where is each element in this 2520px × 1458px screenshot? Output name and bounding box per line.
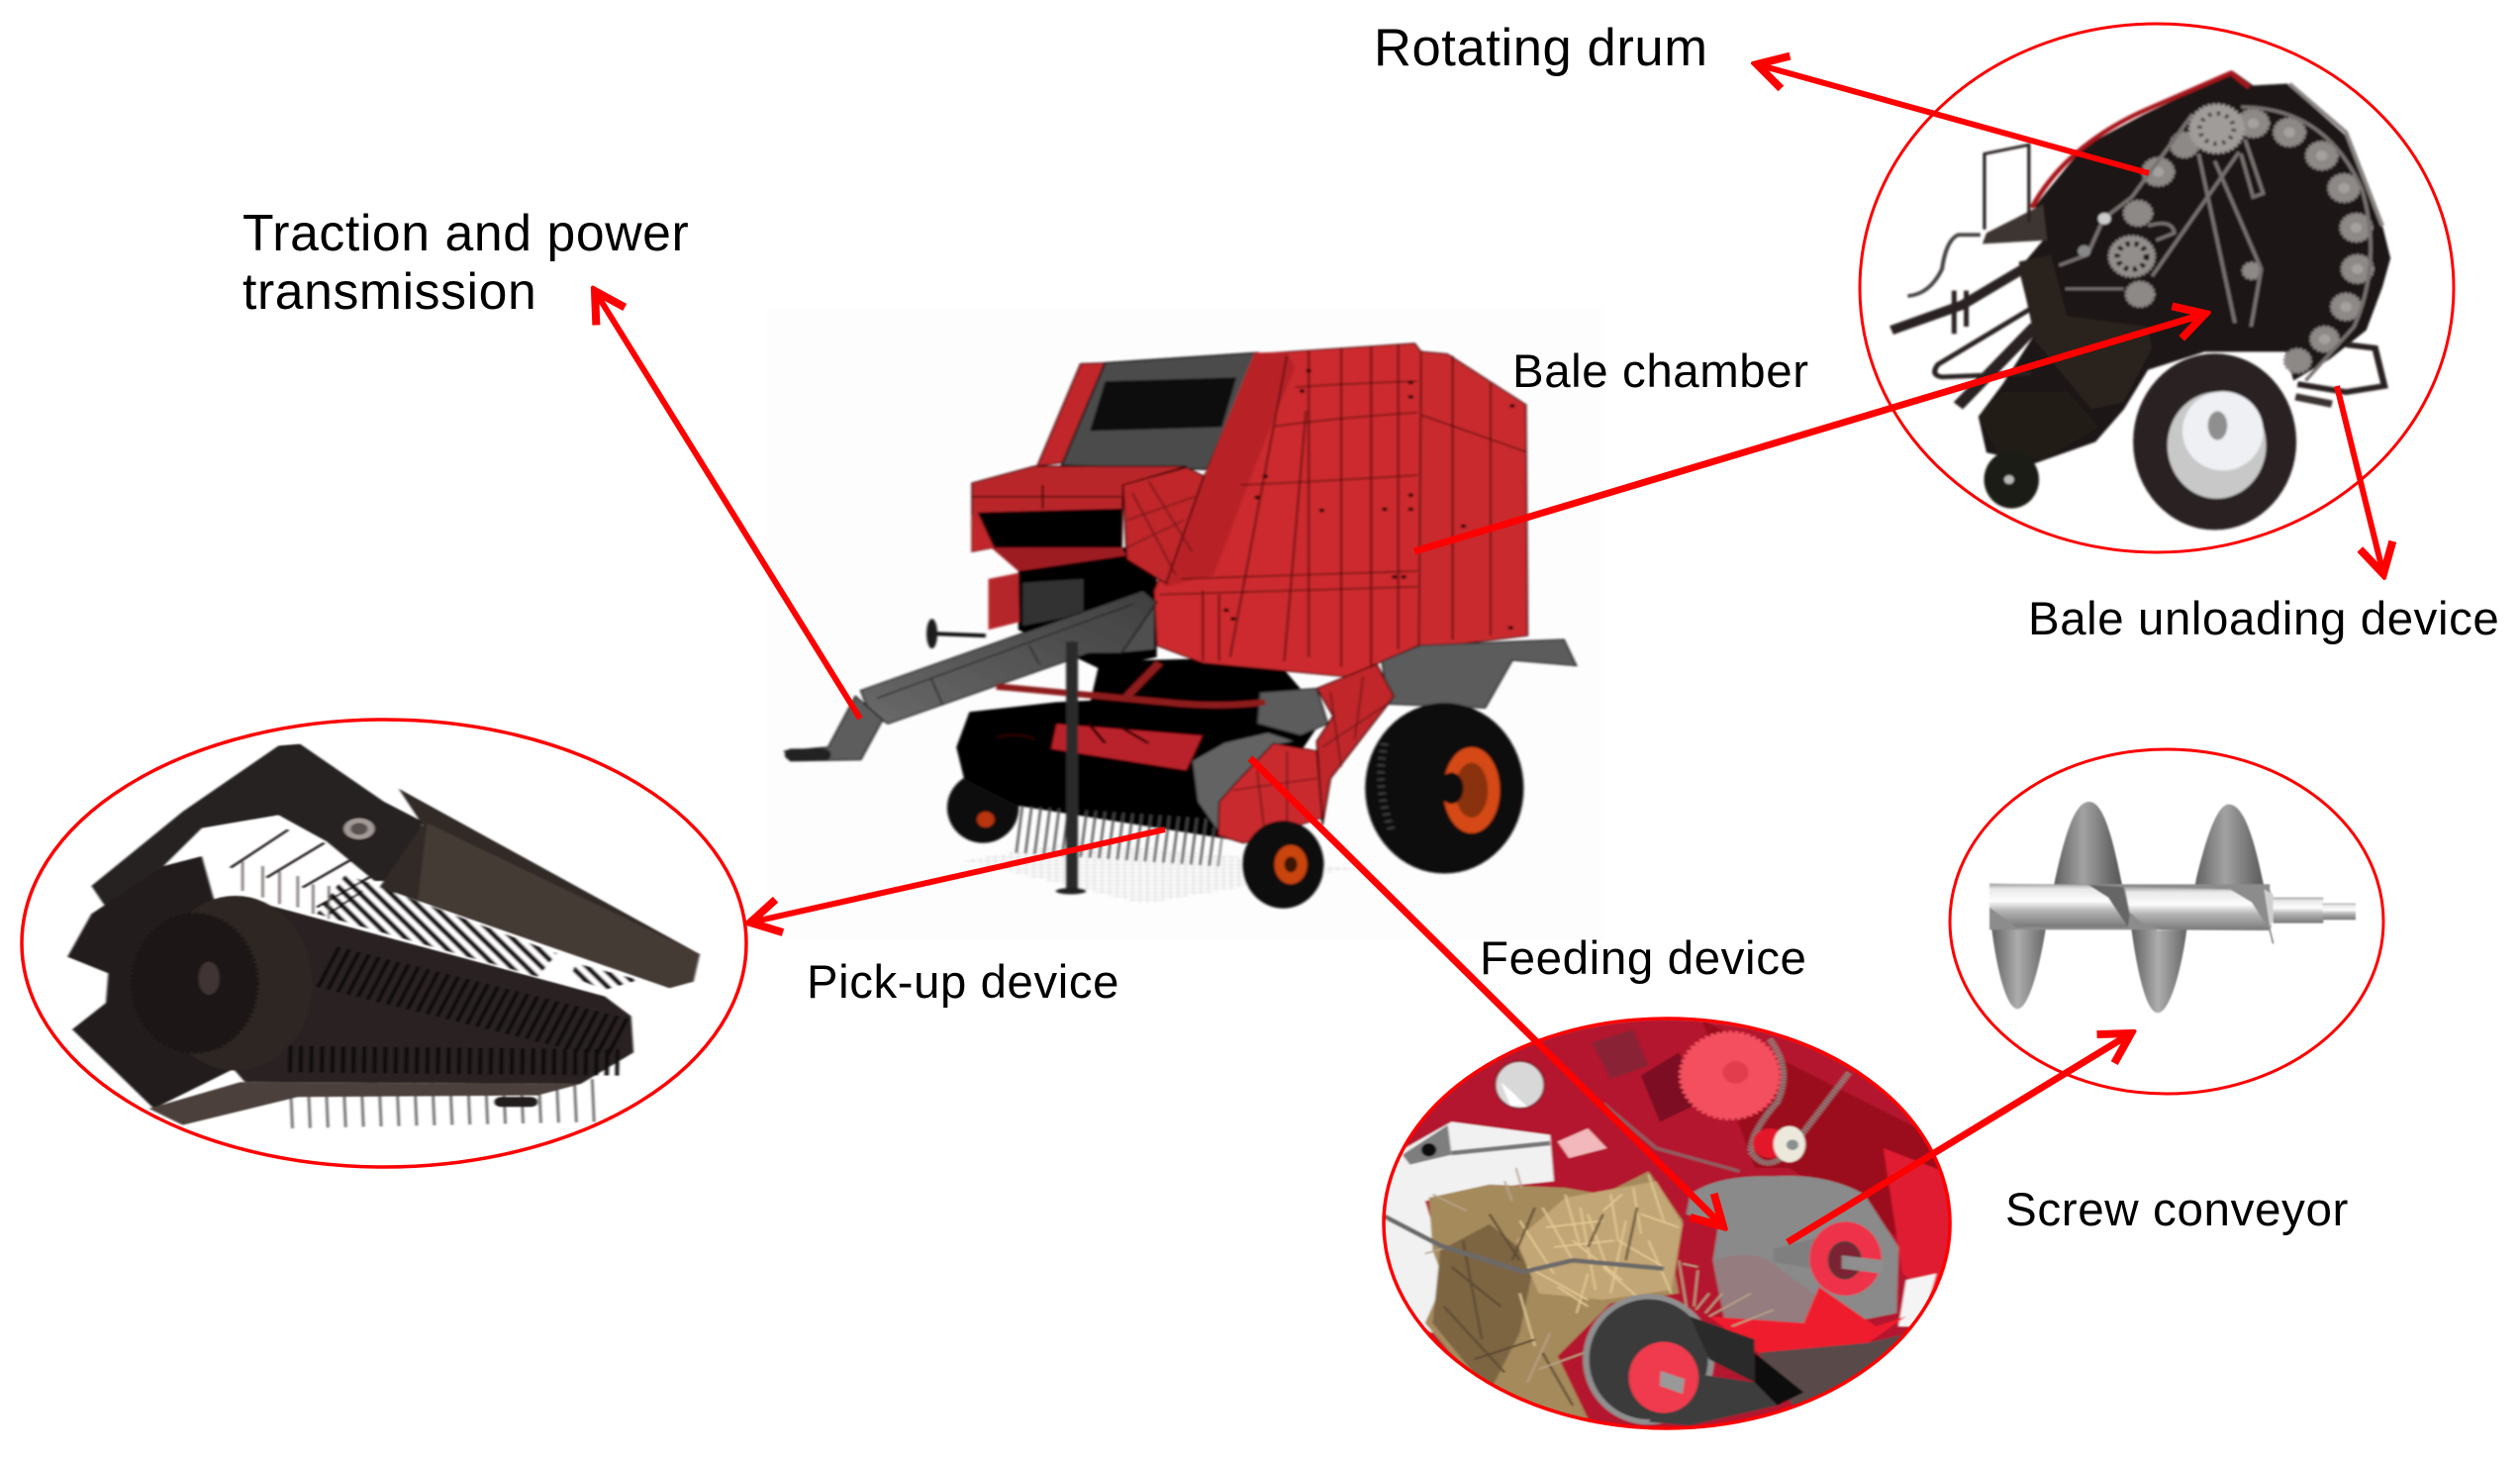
jack handle: [934, 633, 986, 635]
panel: pick-up device: [67, 744, 700, 1125]
gray block beside the drum: [1257, 689, 1327, 735]
ellipse: screw detail: [1950, 749, 2383, 1094]
gray fender: [1192, 732, 1295, 833]
lower roller: [1586, 1297, 1711, 1422]
front wheel: [1242, 821, 1324, 909]
flange: [1809, 1221, 1882, 1296]
dark red plates: [1592, 1029, 1649, 1079]
end plate: [67, 856, 249, 1109]
label: screw conveyor: Screw conveyor: [2005, 1184, 2349, 1236]
arrow: bale unloading: [2337, 386, 2383, 574]
chamber wire lines: [1159, 344, 1526, 669]
red roof edge: [2032, 73, 2249, 208]
panel: bale chamber rear view: [1891, 71, 2390, 530]
gray rear frame: [1382, 639, 1577, 708]
top beam: [379, 789, 700, 988]
bearing: [343, 819, 374, 839]
arrow: rotating drum: [1757, 64, 2149, 173]
chamber bolts: [1223, 369, 1515, 630]
panel: main baler background: [767, 307, 1603, 940]
teeth rows: [288, 967, 620, 1062]
black under body: [1018, 547, 1157, 669]
top window: [1062, 352, 1257, 469]
label: feeding device: Feeding device: [1480, 932, 1807, 985]
main bale chamber panel: [1154, 343, 1421, 677]
ground grid: [964, 841, 1355, 904]
illustration: main round baler: [785, 343, 1577, 909]
red front fender: [1218, 743, 1322, 843]
arrow: traction and power transmission: [595, 291, 860, 719]
fork rod: [1384, 1215, 1664, 1272]
gear: [1681, 1032, 1780, 1118]
screw shaft: [1989, 884, 2270, 929]
left red side piece: [989, 573, 1019, 630]
upper tines through gap: [317, 874, 557, 977]
hopper: [1037, 363, 1108, 466]
drawbar: [861, 591, 1157, 724]
big wheel: [1365, 703, 1523, 874]
rollers: [2124, 110, 2373, 372]
ellipse: bale chamber detail: [1860, 24, 2454, 552]
pick-up black drum: [956, 692, 1316, 841]
shaft: [1774, 1239, 1814, 1267]
white gap left: [1376, 1121, 1554, 1333]
hitch: [785, 696, 883, 761]
hay strands: [1519, 1175, 1679, 1346]
label: traction and power transmission: Traction and power: [242, 204, 689, 261]
side cover lines: [2289, 84, 2382, 226]
arrow: screw conveyor: [1788, 1033, 2131, 1242]
helical blades: [2054, 802, 2126, 908]
hitch and rails: [1891, 145, 2035, 406]
drum: [202, 898, 633, 1084]
label: traction and power transmission: transmission: [242, 262, 536, 320]
blade seam: [2088, 885, 2130, 927]
label: bale chamber: Bale chamber: [1512, 345, 1809, 398]
rear body: [1979, 71, 2390, 463]
guide bar: [1603, 1104, 1739, 1171]
red tie rods: [997, 663, 1265, 705]
hay bale: [1425, 1171, 1683, 1418]
pick-up tines: [1018, 829, 1221, 843]
label: pick-up device: Pick-up device: [807, 956, 1119, 1009]
box side panel: [1123, 467, 1204, 584]
round lamp: [1496, 1061, 1544, 1109]
bottom strip: [149, 1082, 581, 1125]
tensioner: [1752, 1127, 1780, 1159]
left wheel: [947, 773, 1018, 843]
red fender over wheel: [1316, 664, 1394, 826]
ellipse: pick-up detail: [22, 720, 746, 1167]
red trough: [1709, 1287, 1906, 1353]
body edge strip: [1165, 352, 1295, 587]
small wheel: [1985, 450, 2039, 509]
arrow: pick-up device: [750, 829, 1165, 923]
belts: [2059, 107, 2371, 381]
arm: [91, 744, 423, 908]
large wheel: [2133, 353, 2296, 530]
red backdrop: [1402, 1020, 1935, 1427]
unloading bar: [2297, 344, 2384, 392]
panel: screw conveyor part: [1989, 802, 2356, 1013]
arrow: feeding device: [1250, 758, 1723, 1226]
screw flight: [1687, 1176, 1898, 1326]
chain: [1751, 1039, 1849, 1163]
lower tines: [291, 1101, 605, 1107]
red shroud: [1051, 724, 1203, 771]
label: rotating drum: Rotating drum: [1374, 19, 1708, 77]
back red panel: [1417, 351, 1527, 649]
arrow: bale chamber: [1414, 314, 2205, 551]
front box: [972, 466, 1187, 551]
label: bale unloading device: Bale unloading device: [2028, 593, 2499, 645]
ellipse: feeding detail: [1384, 1019, 1950, 1428]
jack stand: [1066, 641, 1078, 892]
sprockets: [2190, 105, 2244, 152]
shaft end: [2264, 889, 2274, 927]
left chassis: [2019, 254, 2152, 410]
panel: feeding device: [1376, 1010, 1970, 1438]
